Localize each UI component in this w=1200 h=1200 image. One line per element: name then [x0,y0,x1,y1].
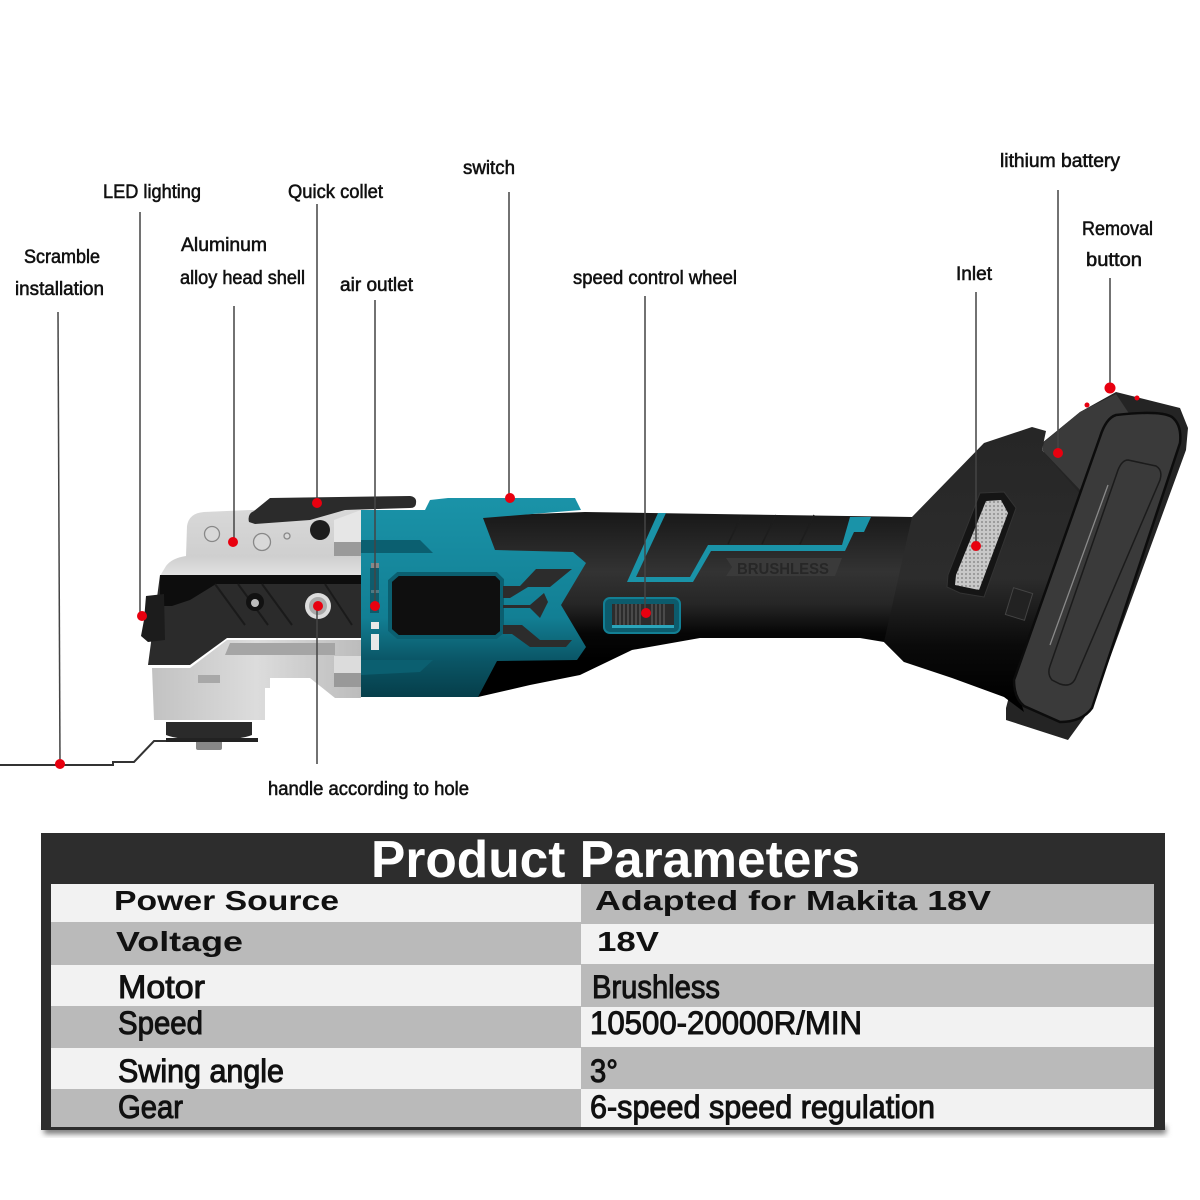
row: power source: Adapted for Makita 18V [595,885,991,916]
row: gear: 6-speed speed regulation [590,1089,935,1125]
battery front panel [1014,413,1180,722]
label: scramble installation: Scramble [24,247,100,268]
label: quick collet: Quick collet [288,182,384,203]
left column rows [51,884,581,1127]
label: aluminum alloy head shell: alloy head shell [180,268,305,289]
leader lines [58,190,1110,764]
label: inlet: Inlet [956,264,993,285]
label: handle according to hole: handle according to hole [268,779,469,800]
label: scramble installation [15,247,104,300]
motor grip end [884,427,1080,712]
row: motor: Brushless [592,969,720,1005]
row: power source: Power Source [114,885,339,916]
label: removal button [1082,219,1153,271]
table shadow [44,1126,1166,1134]
label: scramble installation: installation [15,279,104,300]
inlet vent frame [947,492,1016,597]
label: air outlet: air outlet [340,275,414,296]
row: speed: Speed [118,1005,203,1041]
row: swing angle [118,1053,618,1089]
lever knob [310,520,330,540]
dark band top edge [160,575,361,606]
handle grip panels [728,515,814,544]
battery inner outline [1049,460,1161,685]
battery indicator [1005,588,1033,620]
handle hole [305,593,331,619]
illustration: oscillating multi-tool [0,392,1188,765]
label: LED lighting: LED lighting [103,182,201,203]
label: removal button: Removal [1082,219,1153,240]
black display panel [390,574,502,637]
battery highlight [1050,485,1108,645]
teal housing [361,498,586,697]
air outlet dark strip [370,568,379,613]
teal arrow detail [503,569,572,647]
grey head shell [160,510,361,576]
row: voltage [116,926,659,957]
blade [0,741,258,765]
screw [246,593,264,611]
label: aluminum alloy head shell [180,235,305,289]
lower grey housing [152,640,361,720]
row: gear: Gear [118,1089,183,1125]
table title: Product Parameters [371,831,860,889]
dark band [148,575,361,665]
brushless badge: BRUSHLESS [737,561,829,578]
grey shading [198,510,361,687]
row: speed [118,1005,862,1041]
LED housing [141,594,165,642]
row: motor [118,969,720,1005]
table frame [41,833,1165,1130]
row: motor: Motor [118,969,205,1005]
row: gear [118,1089,935,1125]
quick collet lever [249,496,416,524]
label: removal button: button [1086,250,1142,271]
label: aluminum alloy head shell: Aluminum [181,235,267,256]
row: speed: 10500-20000R/MIN [590,1005,862,1041]
label: speed control wheel: speed control wheel [573,268,737,289]
callout dots [55,382,1140,769]
battery base [1006,392,1188,740]
row: voltage: 18V [597,926,659,957]
band ridges [215,584,352,625]
teal handle stripe [627,513,871,582]
row: voltage: Voltage [116,926,243,957]
speed control wheel [604,598,680,633]
head shell screws [204,526,290,550]
right column rows [581,884,1154,1127]
label: switch: switch [463,158,515,179]
black handle [478,512,930,697]
inlet vent mesh [955,500,1008,590]
row: swing angle: Swing angle [118,1053,284,1089]
row: swing angle: 3° [590,1053,618,1089]
teal facets [361,540,433,675]
air outlet slots [371,563,379,650]
row: power source [114,885,991,916]
label: lithium battery: lithium battery [1000,151,1120,172]
battery base shoulder [1042,394,1130,492]
blade clamp disc [166,722,258,750]
parameter table [41,831,1166,1134]
